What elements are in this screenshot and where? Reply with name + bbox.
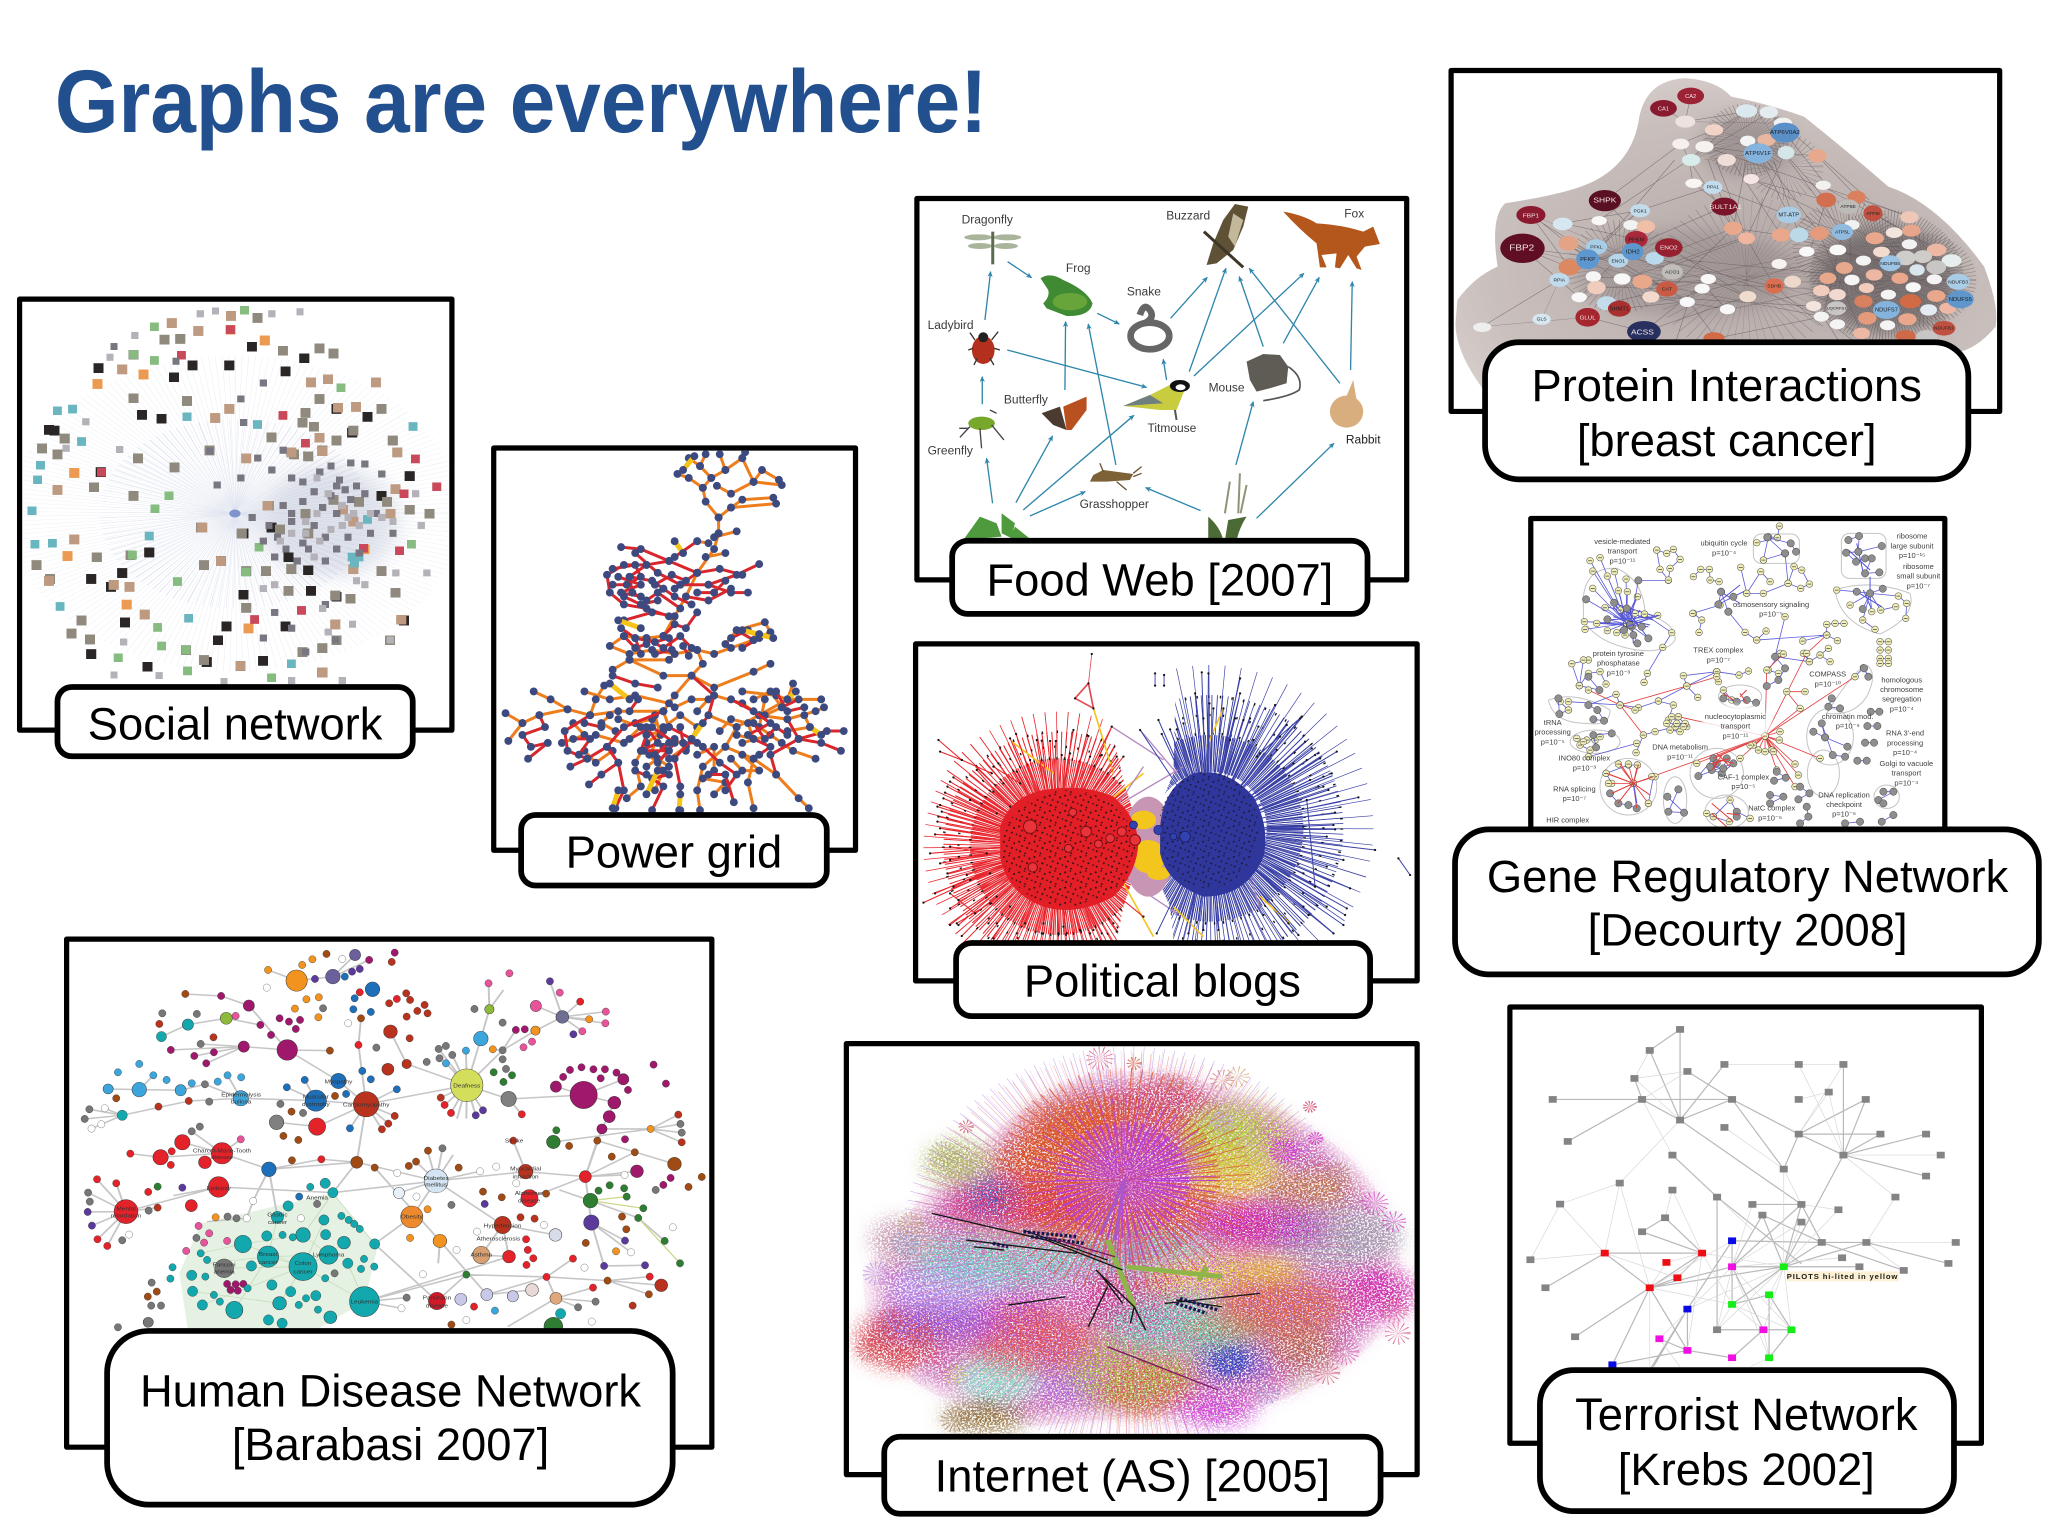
internet label: Internet (AS) [2005] (935, 1451, 1330, 1502)
disease names: Fanconi (213, 1263, 236, 1268)
terrorist label (1540, 1370, 1954, 1511)
yellow bridge (1012, 708, 1290, 937)
red nodes (1601, 1250, 1706, 1291)
disease names (111, 1080, 543, 1309)
food web species labels: Butterfly (1004, 392, 1048, 406)
gene module labels: DNA replication (1818, 790, 1870, 799)
protein node names: IDH2 (1626, 250, 1640, 255)
disease names: Charcot-Marie-Tooth (193, 1149, 251, 1154)
small disease nodes (171, 953, 671, 1291)
disease names: Stroke (505, 1139, 523, 1144)
protein node names: ATP5E (1840, 204, 1856, 209)
panel: gene regulatory network (1455, 519, 2039, 974)
social network graph (32, 310, 437, 682)
gene module labels: Golgi to vacuole (1880, 759, 1933, 768)
icon: plant (1208, 473, 1247, 540)
gene module labels: nucleocytoplasmic (1705, 712, 1766, 721)
gene module labels: COMPASS (1809, 670, 1846, 679)
disease names: Epidermolysis (221, 1093, 261, 1098)
disease names: Breast (259, 1252, 278, 1258)
hub nodes (1023, 808, 1140, 872)
protein node names: SULT1A1 (1709, 203, 1742, 211)
disease names: Atherosclerosis (476, 1237, 520, 1242)
disease network label: Human Disease Network (140, 1366, 641, 1417)
gene module labels: p=10⁻⁴ (1893, 748, 1917, 757)
gene module labels: tRNA (1544, 718, 1562, 727)
gene module labels: phosphatase (1597, 659, 1640, 668)
disease names: cancer (258, 1260, 278, 1266)
gene module labels: protein tyrosine (1593, 649, 1644, 658)
food web frame (917, 199, 1407, 580)
gene network label: Gene Regulatory Network (1487, 851, 2009, 902)
gene module labels: RNA 3'-end (1886, 729, 1924, 738)
protein edge meshes (1593, 122, 1950, 317)
gene module labels: p=10⁻⁹ (1836, 722, 1860, 731)
green nodes (1728, 1263, 1795, 1361)
protein label (1485, 342, 1968, 479)
power grid graph (506, 452, 844, 810)
icon: dragonfly (964, 232, 1021, 264)
gene network label (1455, 829, 2039, 974)
protein node names: SHPK (1593, 196, 1617, 204)
gene module labels: p=10⁻⁵ (1759, 610, 1783, 619)
internet faint backdrop (863, 1070, 1404, 1427)
food web label (952, 541, 1368, 614)
blue fan (1162, 665, 1374, 940)
gene module labels (1535, 532, 1941, 825)
gene module labels: ribosome (1897, 532, 1927, 541)
protein node names: SHMT1 (1610, 307, 1629, 312)
gene module labels: p=10⁻⁷ (1907, 581, 1930, 590)
protein label: [breast cancer] (1577, 415, 1877, 466)
food web species labels: Fox (1344, 207, 1364, 221)
food web arrows (982, 262, 1352, 518)
protein node names: PFKM (1628, 238, 1645, 243)
protein node names: CA2 (1685, 94, 1696, 100)
gene module labels: large subunit (1891, 541, 1934, 550)
protein node names: PFKP (1580, 257, 1596, 263)
social network frame (20, 299, 452, 730)
disease names: cancer (293, 1270, 313, 1275)
disease names: bullosa (231, 1100, 252, 1105)
gene network frame (1531, 519, 1945, 839)
food web species labels: Buzzard (1166, 208, 1210, 222)
gene module labels: CAF-1 complex (1718, 772, 1769, 781)
gene module labels: p=10⁻³ (1607, 668, 1631, 677)
power grid label: Power grid (566, 826, 782, 877)
icon: buzzard (1204, 204, 1248, 267)
protein node names: CA1 (1658, 107, 1669, 112)
protein node names: FBP1 (1523, 213, 1540, 219)
disease names: Hypertension (484, 1224, 521, 1229)
food web species labels: Greenfly (928, 443, 973, 457)
gene module labels: p=10⁻⁴ (1890, 704, 1914, 713)
terrorist network graph (1526, 1026, 1960, 1370)
gene regulatory map (1535, 526, 1941, 828)
gene module labels: vesicle-mediated (1594, 537, 1650, 546)
gene module labels: HIR complex (1546, 816, 1589, 825)
disease names: dystrophy (302, 1102, 330, 1108)
magenta nodes (1655, 1263, 1767, 1361)
disease network graph (85, 949, 702, 1336)
terrorist frame (1510, 1007, 1981, 1443)
icon: rabbit (1330, 380, 1363, 428)
disease names: Myopathy (325, 1080, 352, 1085)
gene module labels: checkpoint (1826, 800, 1863, 809)
gene module labels: p=10⁻⁵ (1731, 782, 1755, 791)
red and blue cores (1000, 788, 1138, 910)
internet second speckle layer (878, 1097, 1344, 1407)
internet label (884, 1437, 1381, 1514)
protein node names (1509, 94, 1972, 336)
white halo behind nucleocytoplasmic label (1702, 705, 1772, 742)
protein node names: ATP6V1F (1745, 151, 1772, 157)
gene module labels: processing (1887, 738, 1923, 747)
disease network frame (67, 939, 712, 1447)
icon: ladybird (968, 332, 1000, 365)
disease network label: [Barabasi 2007] (232, 1419, 549, 1470)
food web species labels: Titmouse (1147, 421, 1197, 435)
disease names: disease (426, 1304, 448, 1309)
political blogs label: Political blogs (1024, 956, 1301, 1007)
gene module labels: p=10⁻¹¹ (1722, 731, 1749, 740)
grey nodes (1526, 1026, 1960, 1340)
large disease nodes (103, 949, 681, 1336)
internet radial feathering (939, 1080, 1321, 1413)
disease names: mellitus (425, 1183, 447, 1188)
social network label: Social network (88, 698, 383, 749)
protein frame (1451, 71, 2000, 411)
disease names: Asthma (470, 1253, 493, 1258)
gene module labels: osmosensory signaling (1733, 600, 1809, 609)
terrorist label: Terrorist Network (1575, 1389, 1918, 1440)
political blogs frame (916, 644, 1417, 981)
panel: protein interactions (1451, 71, 2000, 479)
gene module labels: p=10⁻¹⁰ (1815, 679, 1841, 688)
disease names: Deafness (453, 1084, 480, 1089)
disease edges (85, 955, 682, 1327)
icon: fox (1283, 212, 1380, 270)
disease names: Gastric (267, 1213, 288, 1218)
panel: food web (917, 199, 1407, 614)
gene module labels: NatC complex (1748, 804, 1795, 813)
disease names: Obesity (401, 1215, 423, 1220)
gene module labels: p=10⁻⁴ (1894, 778, 1918, 787)
political blogs network (923, 654, 1410, 962)
gene network label: [Decourty 2008] (1588, 905, 1908, 956)
cancer cluster background (179, 1193, 378, 1330)
gene module labels: p=10⁻³ (1573, 763, 1597, 772)
pilots note: PILOTS hi-lited in yellow (1787, 1272, 1897, 1281)
title: Graphs are everywhere! (55, 52, 987, 151)
food web diagram (928, 204, 1381, 540)
panel: political blogs (916, 644, 1417, 1016)
gene network edges and nodes (1558, 526, 1907, 827)
disease names: disease (518, 1199, 540, 1204)
food web species labels: Rabbit (1346, 432, 1381, 446)
power grid frame (494, 448, 856, 850)
disease names: Alzheimer (515, 1191, 543, 1197)
gene module labels: processing (1535, 728, 1571, 737)
disease names: Parkinson (423, 1296, 451, 1301)
protein node names: NDUFS5 (1949, 297, 1972, 303)
disease names: Mental (116, 1207, 136, 1212)
gene module labels: INO80 complex (1559, 754, 1610, 763)
protein node names: ENO1 (1611, 259, 1625, 263)
protein node names: FBP2 (1509, 243, 1534, 252)
food web species labels: Frog (1066, 261, 1091, 275)
panel: internet (846, 1044, 1417, 1514)
gene module labels: p=10⁻⁷ (1563, 794, 1586, 803)
disease network label (107, 1331, 673, 1505)
gene module labels: transport (1892, 769, 1922, 778)
isolated nodes (1075, 654, 1410, 875)
social network label (57, 687, 413, 756)
food web species labels (928, 207, 1381, 511)
gene module labels: ribosome (1903, 562, 1934, 571)
protein node names: RPIA (1553, 278, 1566, 283)
protein node names: NDUFB3 (1948, 280, 1968, 284)
food web species labels: Snake (1127, 285, 1161, 299)
disease names: Leukemia (351, 1300, 379, 1305)
protein node names: ATP5I (1866, 211, 1880, 216)
icon: leafy plant (963, 513, 1032, 540)
internet frame (846, 1044, 1417, 1475)
food web species labels: Ladybird (928, 318, 974, 332)
political blogs label (956, 943, 1370, 1016)
icon: grasshopper (1090, 463, 1142, 490)
internet map (855, 1052, 1417, 1433)
icon: butterfly (1042, 397, 1087, 430)
disease names: Diabetes (423, 1176, 449, 1182)
disease names: anemia (214, 1270, 236, 1275)
gene module labels: chromatin mod. (1822, 712, 1874, 721)
internet speckled colour regions (855, 1077, 1417, 1433)
gene module labels: p=10⁻¹¹ (1667, 752, 1693, 761)
gene module labels: ubiquitin cycle (1701, 539, 1748, 548)
gene module labels: DNA metabolism (1652, 743, 1708, 752)
gene module labels: p=10⁻⁶ (1758, 813, 1782, 822)
disease names: disease (211, 1155, 233, 1161)
icon: greenfly (959, 410, 1004, 448)
protein node names: CAT (1662, 287, 1672, 292)
gene module labels: homologous (1881, 675, 1922, 684)
icon: snake (1131, 307, 1169, 349)
disease names: retardation (111, 1214, 141, 1219)
gene module labels: p=10⁻⁷ (1707, 655, 1730, 664)
protein node names: UQCRFS1 (1827, 306, 1847, 311)
disease names: Epilepsy (207, 1186, 231, 1192)
disease names: Cardiomyopathy (343, 1103, 390, 1108)
protein nodes dark (1500, 234, 1545, 263)
gene module labels: RNA splicing (1553, 784, 1596, 793)
protein node names: PPA1 (1707, 185, 1719, 190)
protein node names: ACSS (1631, 328, 1654, 336)
protein node names: GLUL (1580, 316, 1596, 321)
protein node names: ATP6V0A2 (1770, 130, 1800, 136)
gene module labels: chromosome (1880, 685, 1923, 694)
gene module labels: p=10⁻¹⁵ (1899, 551, 1925, 560)
strong edges (1545, 1029, 1948, 1370)
protein node names: PFKL (1590, 245, 1603, 249)
protein node names: ENO2 (1660, 245, 1678, 251)
gene module labels: p=10⁻⁵ (1541, 737, 1565, 746)
gene module labels: transport (1721, 722, 1751, 731)
gene module labels: small subunit (1897, 572, 1941, 581)
internet periphery stars (862, 1052, 1404, 1427)
protein node names: SDHB (1767, 284, 1781, 288)
terrorist label: [Krebs 2002] (1618, 1444, 1875, 1495)
food web label: Food Web [2007] (986, 555, 1333, 606)
panel: human disease network (67, 939, 712, 1505)
disease names: Myocardial (510, 1167, 541, 1172)
protein interaction network (1455, 78, 1996, 393)
gene module labels: transport (1608, 547, 1638, 556)
weak edges (1530, 1050, 1956, 1367)
gene module labels: p=10⁻⁴ (1712, 548, 1736, 557)
gene module labels: p=10⁻¹¹ (1609, 556, 1636, 565)
food web species labels: Mouse (1209, 380, 1245, 394)
red fan (943, 732, 1173, 962)
gene module labels: segregation (1882, 695, 1921, 704)
gene module labels: p=10⁻⁶ (1832, 810, 1856, 819)
protein node names: PGK1 (1633, 209, 1647, 213)
panel: social network (20, 299, 452, 756)
disease names: Muscular (303, 1095, 329, 1100)
protein node names: MT-ATP (1778, 213, 1799, 218)
food web species labels: Dragonfly (962, 212, 1013, 226)
panel: terrorist network (1510, 1007, 1981, 1511)
icon: titmouse (1123, 380, 1190, 420)
food web species labels: Grasshopper (1080, 497, 1149, 511)
protein node names: ATP5L (1835, 230, 1850, 235)
icon: frog (1041, 275, 1093, 316)
disease names: cancer (268, 1220, 287, 1226)
panel: power grid (494, 448, 856, 886)
blue spokes (1140, 672, 1375, 935)
protein node names: NDUFB1 (1934, 326, 1954, 331)
protein node names: NDUFS7 (1875, 308, 1898, 313)
blue nodes (1608, 1237, 1736, 1368)
protein nodes light (1736, 104, 1757, 118)
icon: mouse (1247, 354, 1300, 401)
disease names: Anemia (306, 1196, 329, 1201)
protein node names: ACO1 (1665, 270, 1680, 275)
disease names: Lymphoma (313, 1253, 345, 1258)
protein node names: GLS (1537, 317, 1547, 322)
protein label: Protein Interactions (1531, 360, 1922, 411)
red spokes (923, 727, 1143, 938)
gene module labels: TREX complex (1693, 646, 1744, 655)
internet core links (932, 1180, 1260, 1390)
protein node names: NDUFB5 (1880, 261, 1901, 266)
disease names: Colon (295, 1261, 311, 1267)
power grid label (521, 815, 827, 886)
disease names: infarction (513, 1175, 539, 1180)
